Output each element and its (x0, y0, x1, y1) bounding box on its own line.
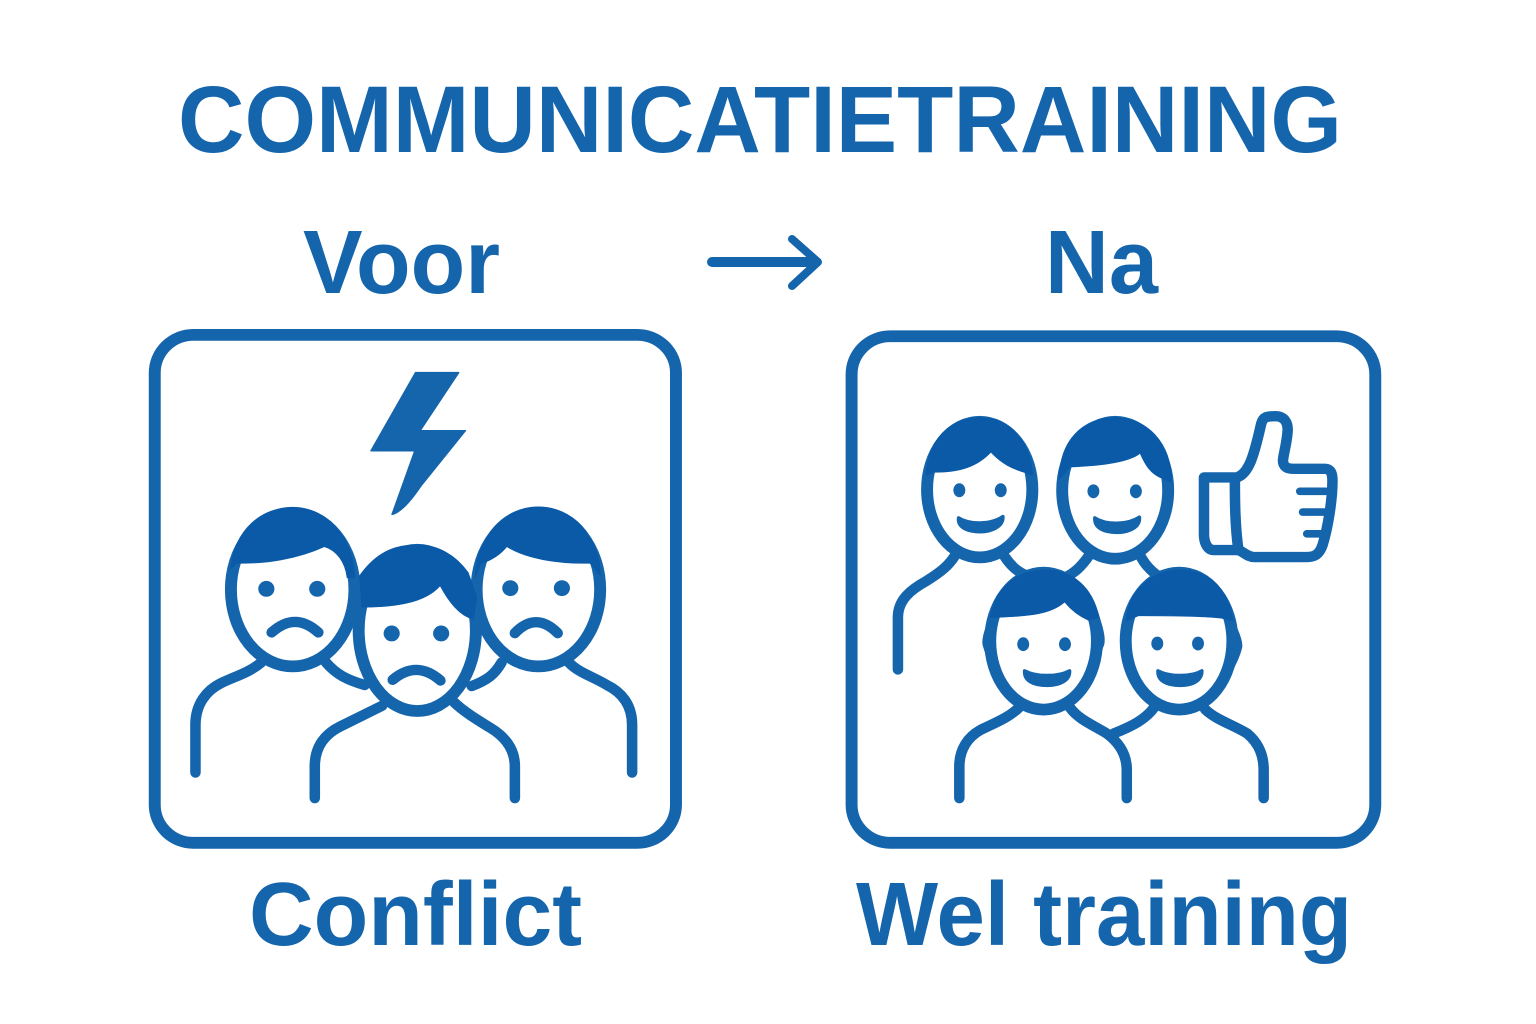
panel: na, team with thumbs up (852, 336, 1375, 843)
heading: Voor: Voor (303, 213, 500, 313)
caption: Conflict: Conflict (249, 865, 582, 965)
person: happy bottom right (1114, 570, 1264, 798)
person: happy top left (898, 418, 1033, 669)
panel frame (852, 336, 1375, 843)
person: sad left (195, 508, 365, 773)
person: happy top right (1059, 418, 1172, 578)
panel: voor, conflict (155, 335, 676, 843)
person: sad middle (315, 545, 515, 798)
panel frame (155, 335, 676, 843)
caption: Wel training: Wel training (856, 865, 1352, 965)
title: COMMUNICATIETRAINING (178, 67, 1342, 173)
arrow: voor naar na (712, 239, 818, 286)
person: happy bottom left (959, 570, 1127, 798)
heading: Na: Na (1045, 213, 1159, 313)
person: sad right (472, 507, 632, 773)
icon: thumbs up (1204, 416, 1332, 557)
icon: lightning bolt (371, 373, 465, 514)
